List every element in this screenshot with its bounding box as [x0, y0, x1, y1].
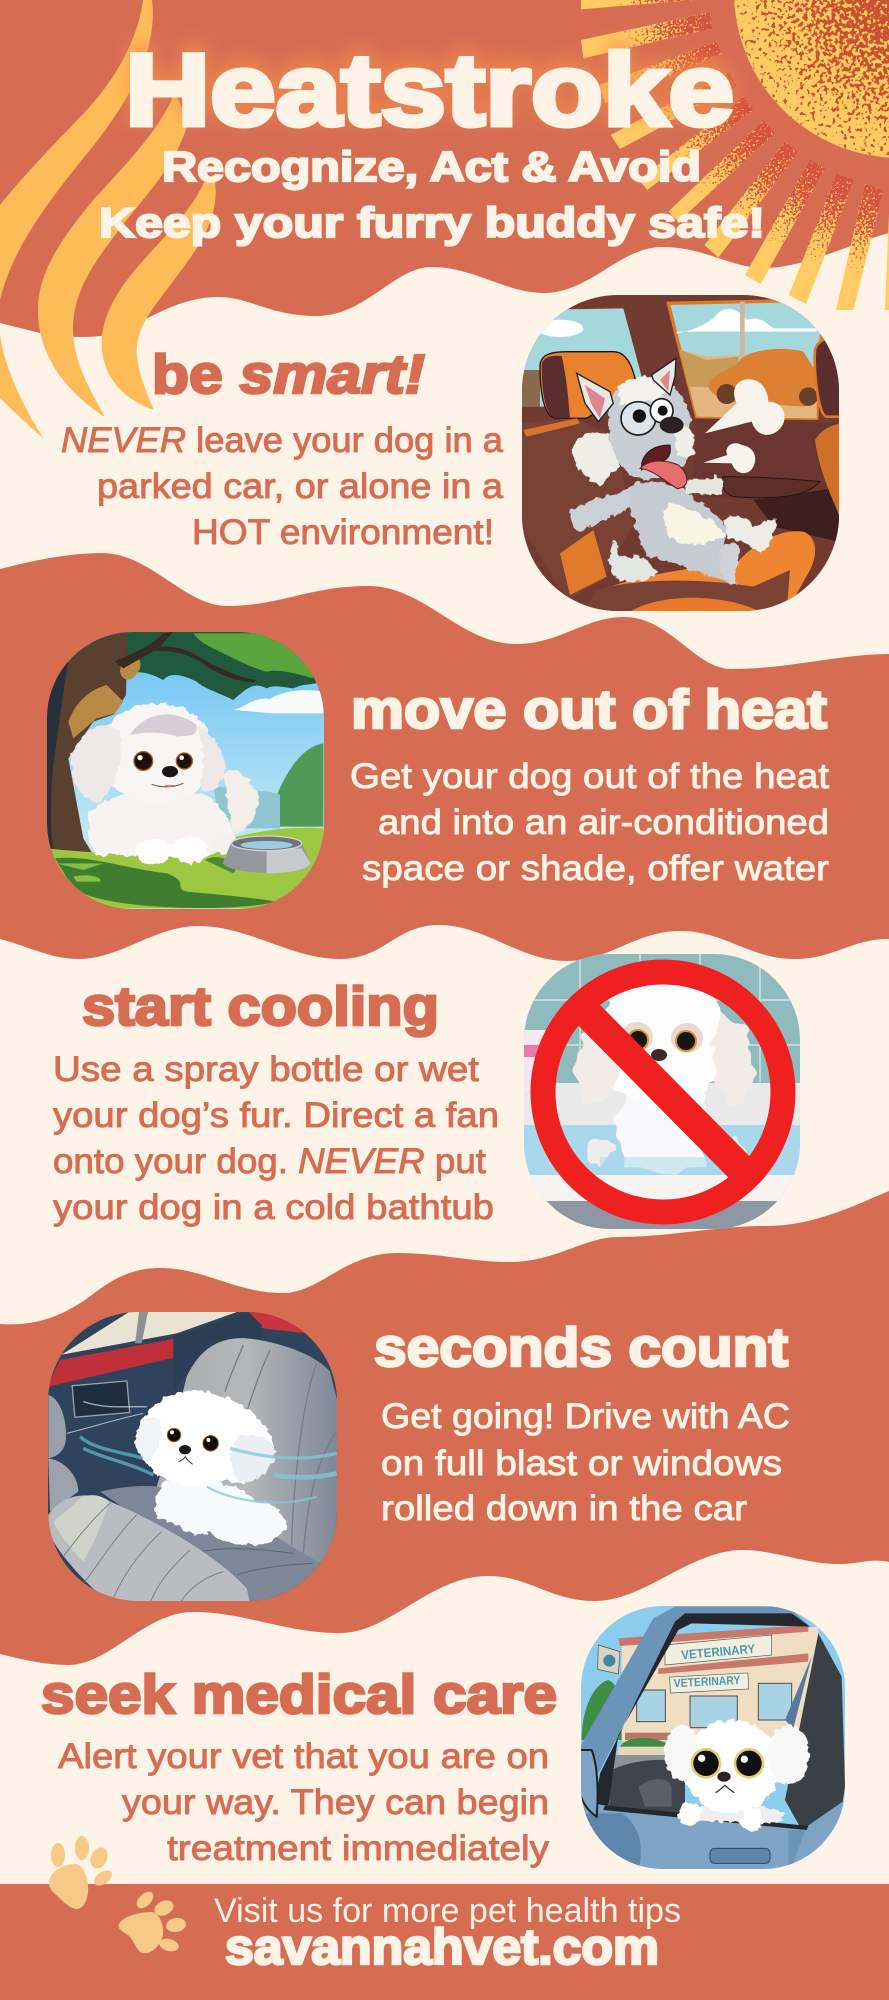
subtitle line 1: Recognize, Act & Avoid: [162, 143, 701, 190]
second terracotta wave band: [0, 553, 889, 961]
icon: paw print upper: [49, 1836, 115, 1909]
heading: seconds count: seconds count: [374, 1316, 788, 1378]
flame 1: [0, 0, 153, 439]
body text: Get your dog out of the heat: [350, 757, 829, 796]
body text: your dog’s fur. Direct a fan: [53, 1096, 499, 1135]
panel 3: start cooling: [53, 975, 499, 1227]
sign: veterinary lower: VETERINARY: [673, 1673, 741, 1690]
image: dog in cold bathtub with prohibition sign: [524, 954, 800, 1229]
footer text: [214, 1892, 681, 1975]
dog: [665, 1720, 809, 1831]
yellow heat flames: [0, 0, 216, 439]
puffs of breath: [703, 379, 785, 473]
prohibition sign: [543, 972, 783, 1212]
footer line: Visit us for more pet health tips: [214, 1892, 681, 1930]
website: savannahvet.com: [225, 1919, 659, 1975]
dog: [570, 377, 777, 585]
water bowl: [223, 836, 311, 873]
heading: seek medical care: seek medical care: [41, 1663, 557, 1725]
heading: start cooling: start cooling: [82, 975, 439, 1037]
body text: and into an air-conditioned: [378, 803, 829, 842]
body text: rolled down in the car: [381, 1489, 747, 1528]
body text: Alert your vet that you are on: [58, 1737, 549, 1776]
flame 2: [38, 92, 188, 417]
body text: parked car, or alone in a: [97, 467, 504, 506]
title glow: Heatstroke: [125, 26, 734, 140]
body text: your dog in a cold bathtub: [53, 1188, 494, 1227]
heading: be smart: be smart!: [152, 343, 425, 405]
body text: onto your dog. NEVER put: [53, 1142, 486, 1181]
image: panting dog in hot car: [520, 290, 845, 615]
body text: NEVER leave your dog in a: [61, 421, 504, 460]
body text: [61, 421, 504, 552]
third terracotta wave band: [0, 1191, 889, 1665]
car door frame: [580, 1607, 808, 1773]
body text: your way. They can begin: [122, 1783, 549, 1822]
body text: [381, 1397, 790, 1528]
sun grain: [734, 0, 889, 158]
ray grain: [581, 0, 883, 310]
body text: [53, 1050, 499, 1227]
body text: space or shade, offer water: [362, 849, 829, 888]
panel 4: seconds count: [374, 1316, 790, 1528]
panel 1: be smart: [61, 343, 504, 552]
sun disc: [734, 0, 889, 158]
image: dog resting in shade: [40, 625, 330, 915]
dog: [574, 975, 754, 1172]
body text: Use a spray bottle or wet: [53, 1050, 479, 1089]
panel 5: seek medical care: [41, 1663, 557, 1868]
subtitle line 2: Keep your furry buddy safe!: [99, 199, 765, 246]
dog: [71, 703, 258, 864]
title: Heatstroke: [125, 33, 734, 147]
body text: HOT environment!: [192, 513, 494, 552]
top terracotta wave header: [0, 0, 889, 337]
dog: [136, 1391, 287, 1545]
heading: move out of heat: move out of heat: [351, 678, 827, 740]
sun rays: [581, 0, 889, 310]
wind streaks left: [67, 1402, 153, 1475]
footer bar: [0, 1884, 889, 2000]
image: dog in cool car with AC: [48, 1312, 337, 1601]
flame 3: [102, 175, 216, 410]
body text: Get going! Drive with AC: [381, 1397, 790, 1436]
body text: treatment immediately: [167, 1829, 550, 1868]
wind streaks right: [207, 1448, 337, 1503]
body text: [58, 1737, 550, 1868]
image: dog arriving at veterinary clinic: [575, 1600, 850, 1875]
sign: veterinary upper: VETERINARY: [681, 1642, 756, 1662]
panel 2: move out of heat: [350, 678, 829, 888]
body text: on full blast or windows: [381, 1444, 782, 1483]
sun with rays: [581, 0, 889, 310]
body text: [350, 757, 829, 888]
icon: paw print lower: [119, 1889, 187, 1953]
